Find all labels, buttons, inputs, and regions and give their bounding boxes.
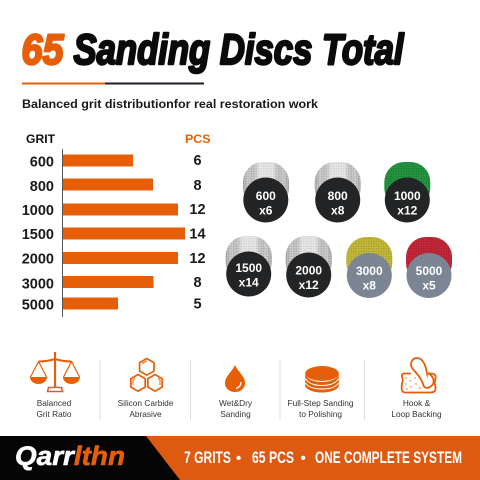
column heading: grit: GRIT <box>26 134 55 146</box>
label: balanced grit ratio: Grit Ratio <box>36 409 72 419</box>
disc: 800 x8 <box>315 162 361 222</box>
label: silicon carbide abrasive: Silicon Carbide <box>118 398 174 408</box>
disc: 1000 x12: 1000 <box>394 189 421 203</box>
row: 5000 <box>22 296 202 314</box>
disc: 600 x6: 600 <box>256 189 276 203</box>
disc: 1000 x12 <box>384 162 430 222</box>
label: full-step sanding to polishing <box>288 398 354 419</box>
disc stacks <box>226 162 452 298</box>
label: silicon carbide abrasive <box>118 398 174 419</box>
disc: 3000 x8: x8 <box>363 278 376 292</box>
subtitle: Balanced grit distributionfor real restoration work <box>22 99 319 111</box>
label: full-step sanding to polishing: to Polishing <box>299 409 342 419</box>
row: 2000 <box>22 251 206 268</box>
row: 1000 <box>22 202 206 219</box>
icon: disc stack <box>305 366 339 392</box>
label: hook and loop backing: Hook & <box>403 398 431 408</box>
disc: 600 x6: x6 <box>259 204 273 218</box>
disc: 3000 x8 <box>346 237 392 298</box>
row: 5000: 5 <box>193 296 202 312</box>
row: 1500: 14 <box>189 226 206 242</box>
disc: 2000 x12: 2000 <box>295 264 322 278</box>
disc: 1500 x14 <box>226 236 272 296</box>
disc: 2000 x12: x12 <box>299 278 319 292</box>
disc: 2000 x12 <box>286 236 332 298</box>
label: full-step sanding to polishing: Full-Step Sanding <box>288 398 354 408</box>
disc: 1500 x14: x14 <box>239 276 259 290</box>
row: 800 <box>30 178 202 195</box>
label: balanced grit ratio <box>36 398 72 419</box>
disc: 600 x6 <box>243 162 289 222</box>
banner slogan: 65 PCS <box>252 449 294 467</box>
disc: 800 x8: 800 <box>328 189 348 203</box>
row: 1500: 1500 <box>22 227 54 243</box>
row: 2000: 12 <box>189 251 206 267</box>
disc: 5000 x5: x5 <box>422 278 436 292</box>
title underline <box>22 82 204 84</box>
row: 3000: 8 <box>193 275 202 291</box>
label: wet and dry sanding: Wet&Dry <box>219 398 253 408</box>
banner slogan: • <box>300 450 306 467</box>
row: 3000 <box>22 275 202 292</box>
label: hook and loop backing: Loop Backing <box>391 409 442 419</box>
orange panel <box>146 436 480 480</box>
row: 2000: 2000 <box>22 252 54 268</box>
label: balanced grit ratio: Balanced <box>37 398 72 408</box>
banner slogan: 7 GRITS <box>184 449 231 467</box>
bar chart <box>22 134 211 317</box>
label: hook and loop backing <box>391 398 442 419</box>
row: 600 <box>30 153 202 170</box>
disc: 800 x8: x8 <box>331 204 345 218</box>
row: 800: 8 <box>193 178 202 194</box>
label: silicon carbide abrasive: Abrasive <box>129 409 162 419</box>
feature strip <box>30 352 442 420</box>
disc: 5000 x5: 5000 <box>416 264 443 278</box>
disc: 1500 x14: 1500 <box>235 261 262 275</box>
disc: 3000 x8: 3000 <box>356 264 383 278</box>
disc: 5000 x5 <box>406 237 452 298</box>
row: 1500 <box>22 226 206 243</box>
row: 600: 600 <box>30 154 54 170</box>
icon: hook and loop <box>402 358 436 392</box>
footer banner <box>0 436 480 480</box>
axis <box>62 149 63 317</box>
row: 5000: 5000 <box>22 298 54 314</box>
row: 3000: 3000 <box>22 276 54 292</box>
icon: water drop <box>225 365 245 392</box>
icon: balance scale <box>30 352 80 392</box>
column heading: pcs: PCS <box>185 134 211 146</box>
label: wet and dry sanding: Sanding <box>220 409 251 419</box>
banner slogan: • <box>236 450 241 467</box>
icon: hexagons <box>131 358 162 391</box>
row: 1000: 1000 <box>22 203 54 219</box>
disc: 1000 x12: x12 <box>397 204 418 218</box>
title: 65 <box>22 26 64 74</box>
banner slogan <box>184 449 462 467</box>
row: 600: 6 <box>193 153 202 169</box>
label: wet and dry sanding <box>219 398 253 419</box>
brand logo: Qarrlthn <box>15 441 125 471</box>
title: Sanding Discs Total <box>74 26 404 74</box>
row: 1000: 12 <box>189 202 206 218</box>
row: 800: 800 <box>30 179 54 195</box>
